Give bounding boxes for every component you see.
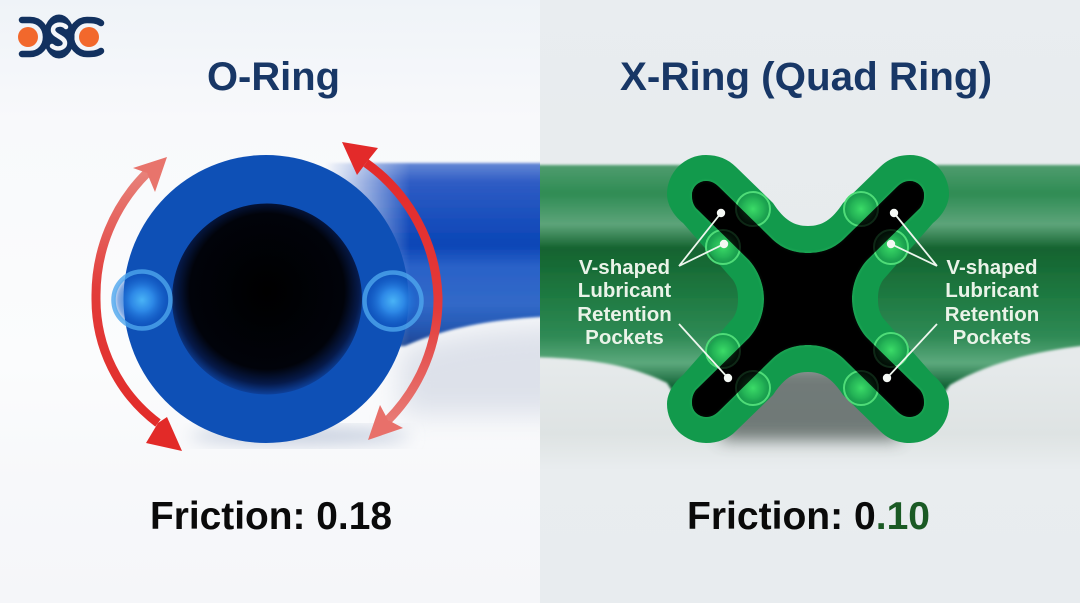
ring floor shadow <box>190 428 410 444</box>
tube floor shadow <box>400 324 570 415</box>
callout text: right: Retention <box>945 303 1039 326</box>
pocket glow: upper left pair <box>706 192 770 264</box>
panel: O-Ring <box>0 142 540 451</box>
panel: X-Ring <box>530 0 1080 603</box>
pocket interiors darkened inside the hollow <box>692 181 924 417</box>
green tube background: right <box>878 163 1080 393</box>
pocket glow: lower right pair <box>844 333 908 405</box>
X-ring cross-section <box>667 155 949 443</box>
callout text: left: Lubricant <box>578 279 671 302</box>
callout lines: right <box>883 209 937 382</box>
arrow: right friction arc <box>342 142 438 440</box>
callout text: right: V-shaped <box>946 256 1038 279</box>
callout text: left: V-shaped <box>579 256 670 279</box>
callout text: left: Pockets <box>585 326 664 349</box>
friction value: O-Ring: Friction: 0.18 <box>150 495 392 538</box>
lubricant contact point: right <box>364 272 422 330</box>
callout text: right: Pockets <box>953 326 1031 349</box>
title: X-Ring (Quad Ring): X-Ring (Quad Ring) <box>620 55 992 99</box>
inner bore <box>172 204 362 394</box>
arrow: left friction arc <box>96 157 182 451</box>
pocket glow: lower left pair <box>706 334 770 405</box>
O-ring cross-section <box>124 155 408 443</box>
blue tube background <box>329 161 540 348</box>
pocket glow: upper right pair <box>844 192 908 264</box>
callout text: left: Retention <box>577 303 672 326</box>
green tube background: left <box>540 163 738 392</box>
title: O-Ring: O-Ring <box>207 55 340 99</box>
ring floor shadow <box>720 365 900 440</box>
logo <box>18 14 101 58</box>
lubricant contact point: left <box>114 272 170 328</box>
callout lines: left <box>679 209 732 382</box>
callout text: right: Lubricant <box>945 279 1039 302</box>
friction value: X-Ring: Friction: 0.10 <box>687 495 930 538</box>
